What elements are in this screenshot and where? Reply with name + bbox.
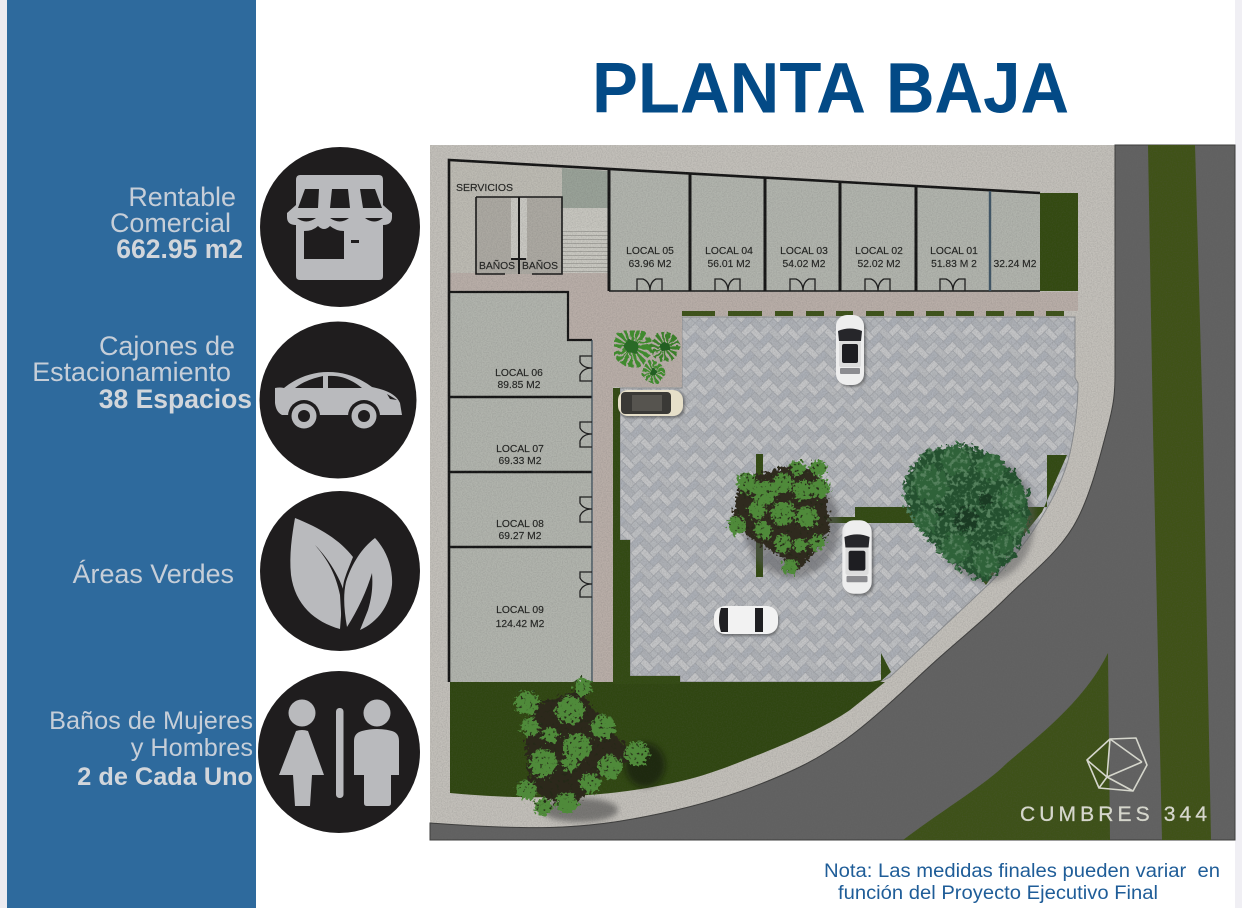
room labels: 69.27 M2 [499,531,542,542]
room labels: 124.42 M2 [496,619,545,630]
walkways [449,273,1078,682]
tree: lower left [515,678,665,822]
stat: rentable comercial [110,182,243,264]
stat: cajones de estacionamiento: Estacionamiento [32,357,231,387]
room labels: LOCAL 07 [496,444,544,455]
note: Nota: Las medidas finales pueden variar en [824,861,1220,882]
room labels: 52.02 M2 [858,259,901,270]
panel: site plan [430,145,1235,840]
room labels [456,182,1037,630]
room labels: LOCAL 01 [930,246,978,257]
tree: large right [903,444,1035,582]
room labels: 51.83 M 2 [931,259,977,270]
right page margin [1235,0,1242,908]
stat: banos: Baños de Mujeres [49,707,253,735]
room labels: BAÑOS [479,259,515,272]
icon: restroom [258,671,420,833]
road [430,145,1235,840]
stat: rentable comercial: 662.95 m2 [116,234,243,264]
car: white horizontal [714,606,779,636]
stat: banos: 2 de Cada Uno [77,763,253,791]
room labels: LOCAL 08 [496,519,544,530]
tree: central [728,460,840,578]
icon: leaves [260,491,420,651]
stat: cajones de estacionamiento [32,331,252,414]
logo: cumbres 344: CUMBRES 344 [1020,803,1207,826]
title: PLANTA [592,50,866,128]
left page margin [0,0,7,908]
room labels: 56.01 M2 [708,259,751,270]
garden dashes over walkway [682,311,1064,316]
car: lower parking [842,520,874,596]
concrete ground [430,145,1235,840]
green corner triangle [903,653,1110,840]
services room [449,160,608,274]
front garden [450,682,885,797]
car: beige [618,390,685,418]
room labels: 69.33 M2 [499,456,542,467]
building walls [449,160,1040,682]
room labels: 32.24 M2 [994,259,1037,270]
stat: areas verdes: Áreas Verdes [73,559,234,589]
room labels: LOCAL 06 [495,368,543,379]
shop units [449,170,1040,682]
green strips [613,388,1067,684]
logo: cumbres 344 [1020,738,1207,826]
room labels: LOCAL 03 [780,246,828,257]
car: top parking [836,315,866,387]
road median green [1148,145,1211,840]
icon: car [260,322,416,478]
doors [580,279,965,597]
tree: palm cluster [622,337,672,378]
stat: rentable comercial: Rentable [128,182,236,212]
paved parking area [620,317,1078,682]
blue sidebar panel [7,0,256,908]
title [592,50,1069,128]
room labels: LOCAL 04 [705,246,753,257]
stat: cajones de estacionamiento: 38 Espacios [99,384,252,414]
title: BAJA [886,50,1069,128]
room labels: 89.85 M2 [498,380,541,391]
icon: storefront [260,147,420,307]
room labels: LOCAL 05 [626,246,674,257]
note [824,861,1220,904]
texture grain [430,145,1235,840]
room labels: BAÑOS [522,259,558,272]
room labels: 54.02 M2 [783,259,826,270]
stat: banos: y Hombres [131,734,253,762]
room labels: LOCAL 09 [496,605,544,616]
stat: cajones de estacionamiento: Cajones de [99,331,235,361]
stat: rentable comercial: Comercial [110,208,231,238]
room labels: SERVICIOS [456,182,513,194]
stat: banos [49,707,253,791]
end green plot [1040,193,1078,291]
room labels: 63.96 M2 [629,259,672,270]
note: función del Proyecto Ejecutivo Final [838,883,1158,904]
room labels: LOCAL 02 [855,246,903,257]
